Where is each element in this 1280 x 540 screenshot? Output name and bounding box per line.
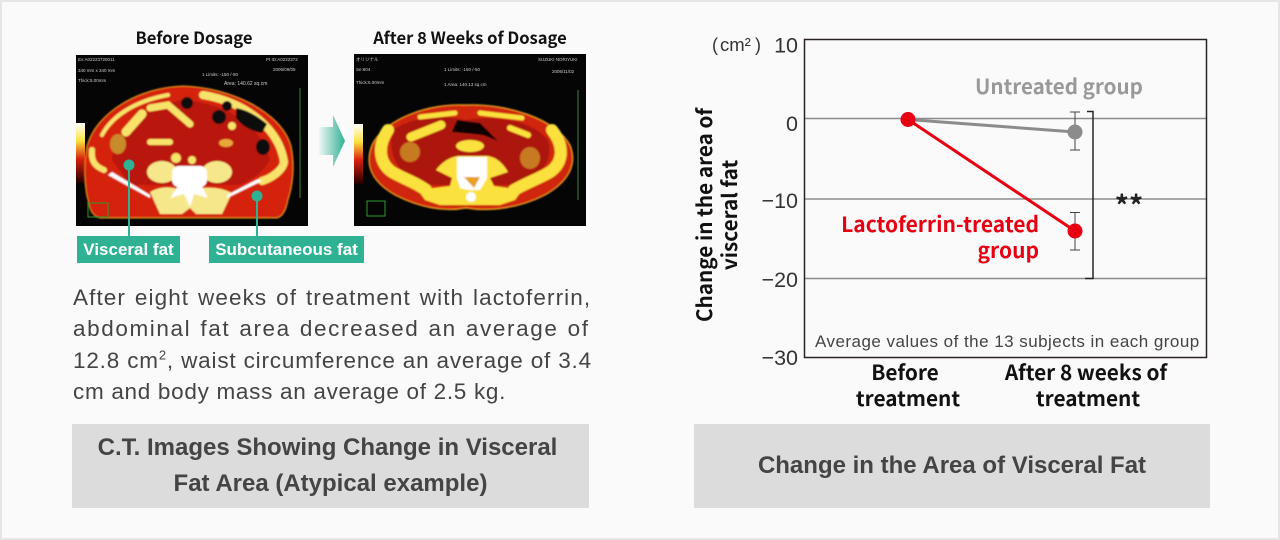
description text: 12.8 cm2, waist circumference an average of 3.4 [73, 347, 592, 373]
CT image: before [76, 55, 308, 226]
x axis labels: treatment [856, 382, 960, 412]
y axis tick labels: −10 [762, 189, 798, 213]
CT image: after: Thick:5.00mm [356, 80, 385, 85]
unit label: ) [755, 35, 761, 55]
y axis title: Change in the area of [688, 107, 718, 322]
description text [73, 285, 592, 404]
heading: after 8 weeks of dosage: After 8 Weeks of Dosage [373, 25, 567, 49]
label: subcutaneous fat [209, 236, 364, 263]
x axis labels: treatment [1036, 382, 1140, 412]
label: untreated group: Untreated group [975, 70, 1143, 100]
description text: After eight weeks of treatment with lactoferrin, [73, 285, 591, 310]
unit label [712, 34, 761, 55]
CT image: after: 2006/11/02 [552, 69, 575, 74]
CT image: before: 2006/09/05 [273, 67, 296, 72]
significance marker: ** [1115, 185, 1143, 225]
y axis tick labels: 10 [774, 34, 798, 58]
CT scan images with arrow and callouts [76, 54, 586, 236]
CT image: before: 1 Limits: -150 /-50 [202, 72, 239, 77]
caption: change in area [694, 424, 1210, 508]
CT image: before: Pt ID:A0222372 [266, 57, 298, 62]
CT image: before: 340 mm x 340 mm [78, 68, 116, 73]
series: lactoferrin-treated group [900, 112, 1082, 238]
CT image: after: Se:604 [356, 67, 371, 72]
label: visceral fat: Visceral fat [83, 240, 174, 259]
x axis labels: After 8 weeks of [1004, 356, 1168, 386]
series: untreated group [908, 120, 1082, 140]
arrow between scans [319, 115, 345, 167]
error bars [1070, 112, 1080, 250]
label: lactoferrin-treated group: Lactoferrin-treated [841, 209, 1039, 239]
label: lactoferrin-treated group: group [978, 235, 1039, 265]
y axis tick labels [762, 34, 798, 370]
grid lines [804, 118, 1207, 278]
CT image: before: Ex:A02223720011 [78, 57, 115, 62]
description text: cm and body mass an average of 2.5 kg. [73, 379, 506, 404]
y axis title: visceral fat [713, 160, 743, 270]
caption: change in area: Change in the Area of Visceral Fat [758, 452, 1146, 479]
unit label: ( [712, 35, 718, 55]
CT image: after: SUZUKI NORIYUKI [538, 57, 578, 62]
caption: CT images: Fat Area (Atypical example) [174, 470, 487, 497]
significance bracket [1085, 112, 1093, 278]
chart frame [804, 40, 1206, 358]
CT image: after: オリジナル [356, 57, 379, 63]
line chart: change in visceral fat [688, 34, 1208, 412]
caption: CT images [72, 424, 589, 508]
CT image: before: Area: 140.62 sq.cm [224, 81, 267, 87]
callout line: subcutaneous fat [252, 191, 262, 238]
caption: CT images: C.T. Images Showing Change in Visceral [98, 434, 557, 461]
heading: before dosage: Before Dosage [135, 25, 253, 49]
label: subcutaneous fat: Subcutaneous fat [215, 240, 358, 259]
y axis tick labels: −30 [762, 346, 798, 370]
x axis labels [856, 356, 1168, 412]
label: visceral fat [77, 236, 180, 263]
CT image: before: Thick:5.00mm [78, 78, 107, 83]
callout line: visceral fat [124, 160, 134, 238]
description text: abdominal fat area decreased an average of [73, 316, 590, 341]
y axis tick labels: −20 [762, 268, 798, 292]
unit label: cm² [720, 34, 751, 55]
y axis tick labels: 0 [786, 112, 798, 136]
x axis labels: Before [871, 356, 939, 386]
CT image: after: 1 Limits: -150 /-50 [444, 67, 481, 72]
CT image: after [354, 54, 586, 226]
chart note: Average values of the 13 subjects in each group [815, 332, 1200, 351]
CT image: after: 1 Area: 140.13 sq.cm [444, 82, 487, 87]
